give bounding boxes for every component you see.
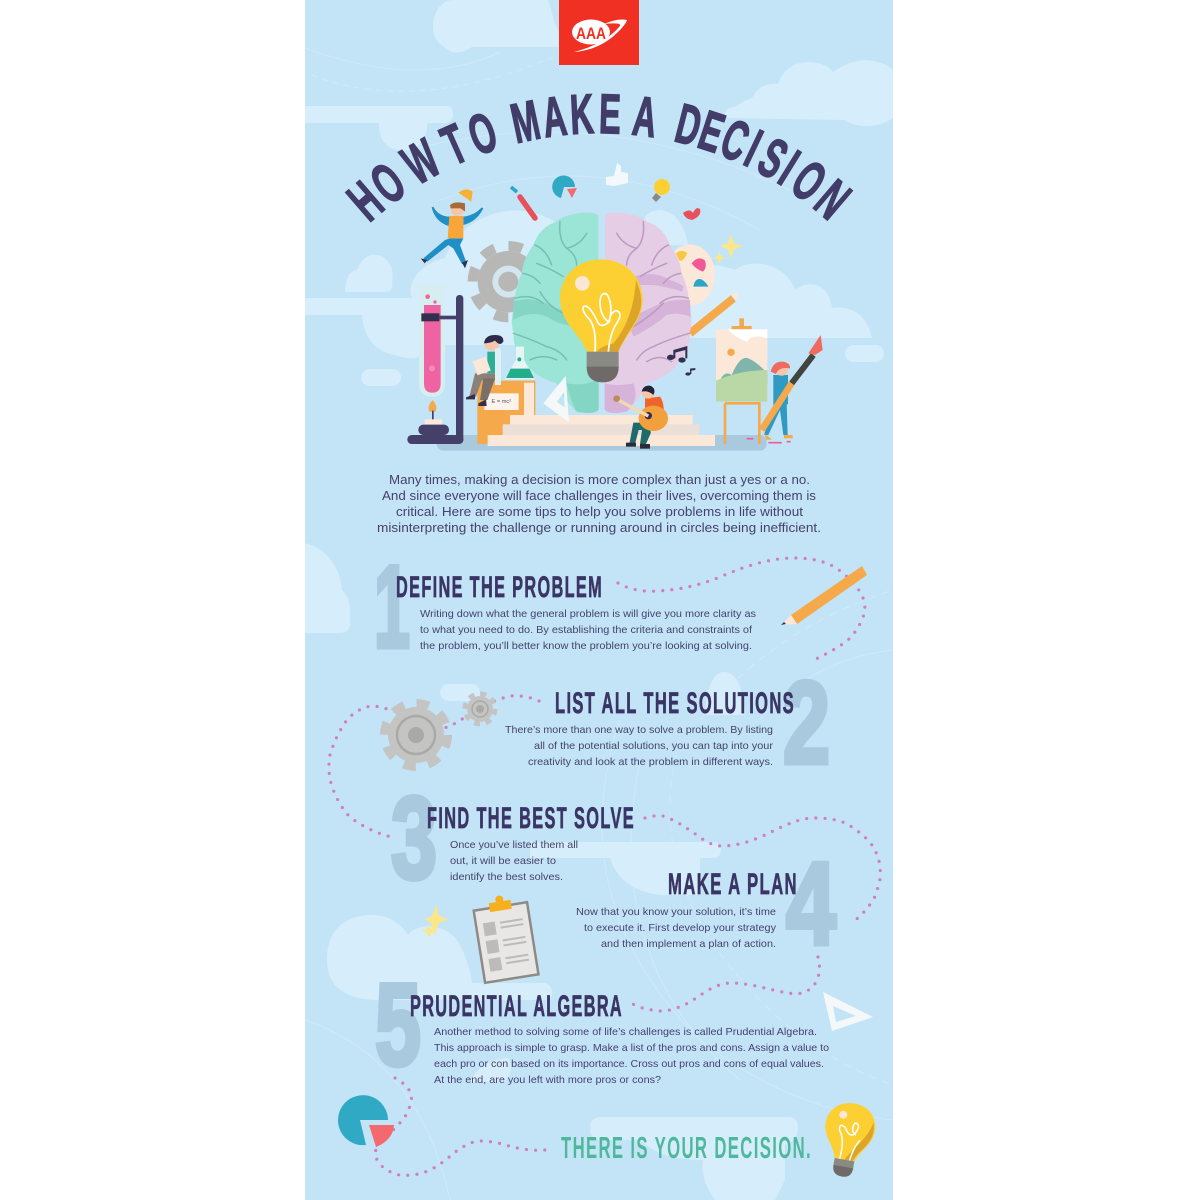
cloud: left bar xyxy=(305,106,453,151)
title: D xyxy=(670,92,708,158)
title xyxy=(336,83,862,233)
cloud: pill left xyxy=(361,369,401,386)
icon: small gear xyxy=(465,694,495,724)
body text xyxy=(450,840,578,883)
title: O xyxy=(781,148,837,214)
cloud: pill right xyxy=(845,345,884,362)
number 1: 1 xyxy=(374,541,410,672)
title: O xyxy=(460,100,505,167)
body text: out, it will be easier to xyxy=(450,856,556,867)
number 2: 2 xyxy=(783,657,830,788)
intro text: critical. Here are some tips to help you solve problems in life without xyxy=(396,504,803,519)
character: guitarist xyxy=(613,386,668,449)
heading: FIND THE BEST SOLVE xyxy=(427,802,635,835)
body text: and then implement a plan of action. xyxy=(601,939,776,950)
intro text xyxy=(377,472,821,535)
body text xyxy=(434,1027,829,1086)
logo: AAA: AAA xyxy=(576,24,606,43)
title: T xyxy=(433,112,476,177)
icon: heart xyxy=(683,208,700,220)
title: O xyxy=(359,151,417,216)
character: painter xyxy=(747,335,823,443)
body text: There’s more than one way to solve a problem. By listing xyxy=(505,725,773,736)
title: I xyxy=(736,118,771,179)
body text: Once you’ve listed them all xyxy=(450,840,578,851)
title: C xyxy=(712,107,758,174)
title: A xyxy=(629,84,661,149)
body text xyxy=(420,609,756,652)
cloud: bottom xyxy=(590,1117,798,1200)
icon: pencil by brain xyxy=(690,292,739,333)
closing statement: THERE IS YOUR DECISION. xyxy=(561,1130,812,1165)
body text: Writing down what the general problem is will give you more clarity as xyxy=(420,609,756,620)
step 4 xyxy=(576,838,836,969)
heading: PRUDENTIAL ALGEBRA xyxy=(410,990,623,1023)
body text xyxy=(505,725,774,768)
icon: burner and flame xyxy=(418,400,449,435)
cloud: bump behind two xyxy=(705,672,745,715)
icon: sparkles by clipboard xyxy=(422,905,448,938)
title: A xyxy=(539,85,570,149)
dotted path: step three xyxy=(645,816,880,923)
icon: flask xyxy=(505,347,535,379)
step 5 xyxy=(375,959,829,1090)
icon: thumbs up xyxy=(606,163,628,186)
icon: test tube on stand xyxy=(407,285,463,444)
step 1 xyxy=(374,541,756,672)
logo: AAA xyxy=(559,0,639,65)
step 2 xyxy=(505,657,830,788)
ground shadow xyxy=(437,435,767,451)
body text: to what you need to do. By establishing the criteria and constraints of xyxy=(420,625,752,636)
number 3: 3 xyxy=(391,772,437,903)
title: K xyxy=(569,83,595,146)
cloud: small under step five xyxy=(470,1058,511,1082)
heading: LIST ALL THE SOLUTIONS xyxy=(555,687,795,720)
icon: floating pie chart xyxy=(552,176,577,198)
body text: each pro or con based on its importance. Cross out pros and cons of equal values. xyxy=(434,1059,824,1070)
body text: the problem, you’ll better know the problem you’re looking at solving. xyxy=(420,641,752,652)
cloud: right of illustration xyxy=(690,264,872,338)
cloud: top centre xyxy=(433,0,560,52)
title: H xyxy=(336,170,395,233)
brain: left hemisphere xyxy=(512,212,600,413)
icon: main light bulb xyxy=(560,259,643,382)
heading: DEFINE THE PROBLEM xyxy=(396,571,603,604)
icon: palette xyxy=(674,244,715,306)
intro text: misinterpreting the challenge or running around in circles being inefficient. xyxy=(377,520,821,535)
body text xyxy=(576,907,777,950)
dotted path: step two xyxy=(329,696,539,837)
icon: pencil xyxy=(781,566,867,625)
body text: all of the potential solutions, you can tap into your xyxy=(534,741,774,752)
intro text: Many times, making a decision is more complex than just a yes or a no. xyxy=(389,472,810,487)
dotted path: step five xyxy=(375,1078,545,1175)
heading: MAKE A PLAN xyxy=(668,868,798,901)
body text: identify the best solves. xyxy=(450,872,563,883)
cloud: top right xyxy=(725,60,893,126)
cloud: behind illustration xyxy=(305,210,560,358)
icon: small bulb xyxy=(652,179,670,202)
cloud: small left xyxy=(345,255,393,292)
title: E xyxy=(692,99,732,165)
dotted path: step four xyxy=(633,957,820,1011)
icon: music notes xyxy=(667,346,695,376)
icon: gear behind brain xyxy=(473,246,544,317)
infographic xyxy=(305,0,893,1200)
title: E xyxy=(598,83,622,146)
icon: book xyxy=(477,381,535,444)
brain: right hemisphere xyxy=(605,212,692,413)
cloud: section one left xyxy=(305,543,350,633)
icon: sparkles xyxy=(713,234,743,264)
body text: creativity and look at the problem in different ways. xyxy=(528,757,773,768)
icon: floating test tube xyxy=(511,187,535,218)
body text: to execute it. First develop your strategy xyxy=(584,923,777,934)
title: M xyxy=(506,89,545,155)
icon: set square xyxy=(823,992,873,1031)
body text: Another method to solving some of life’s challenges is called Prudential Algebra. xyxy=(434,1027,817,1038)
step 3 xyxy=(391,772,635,903)
icon: set square xyxy=(543,376,569,422)
icon: hard hat xyxy=(458,189,473,202)
body text: At the end, are you left with more pros or cons? xyxy=(434,1075,661,1086)
icon: book: E = mc² xyxy=(492,399,511,405)
icon: stairs xyxy=(488,415,715,446)
dotted path: step one xyxy=(618,558,865,659)
illustration: brain and characters xyxy=(407,189,823,451)
character: jumping worker xyxy=(421,202,483,268)
title: I xyxy=(769,139,809,197)
icon: pie chart xyxy=(338,1095,394,1147)
cloud: bar step three xyxy=(530,842,721,895)
cloud: pill step two xyxy=(440,684,480,701)
icon: clipboard xyxy=(472,891,538,983)
character: scientist xyxy=(466,335,503,406)
title: S xyxy=(748,126,797,191)
title: W xyxy=(392,127,450,197)
number 4: 4 xyxy=(786,838,836,969)
icon: easel and canvas xyxy=(716,318,767,444)
intro text: And since everyone will face challenges in their lives, overcoming them is xyxy=(382,488,817,503)
cloud: middle lower left xyxy=(327,915,552,1000)
body text: Now that you know your solution, it’s time xyxy=(576,907,776,918)
body text: This approach is simple to grasp. Make a list of the pros and cons. Assign a value to xyxy=(434,1043,829,1054)
number 5: 5 xyxy=(375,959,421,1090)
title: N xyxy=(803,168,862,231)
icon: large gear xyxy=(385,704,447,766)
icon: closing bulb xyxy=(817,1099,879,1181)
